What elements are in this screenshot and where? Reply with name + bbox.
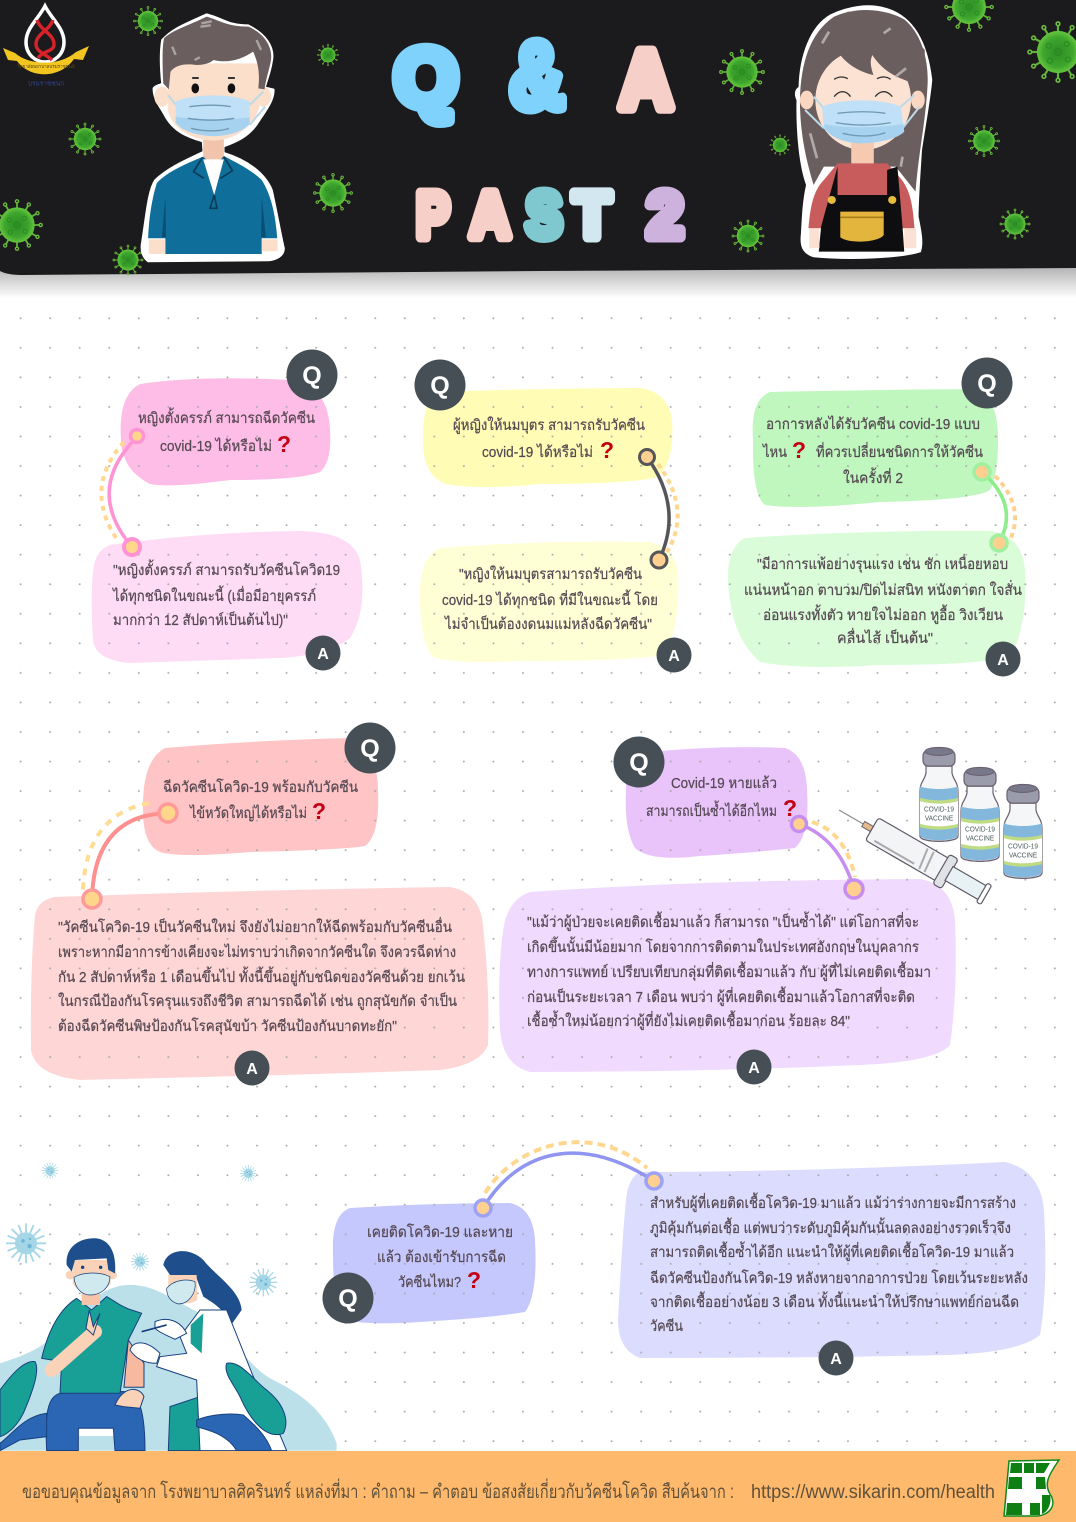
illustration: vaccine vials: VACCINE: [925, 815, 954, 822]
connector: [792, 816, 863, 898]
Q badge: Q: [338, 1285, 358, 1313]
question text: [453, 416, 645, 463]
Q badge: [962, 358, 1012, 408]
answer text: [112, 559, 340, 629]
icon: college logo: บรมราชชนก: [28, 80, 64, 88]
answer text: [442, 565, 658, 633]
answer text: เกิดขึ้นนั้นมีน้อยมาก โดยจากการติดตามในประเทศอังกฤษในบุคลากร: [527, 936, 919, 956]
Q badge: Q: [360, 735, 380, 763]
question bubble: [333, 1203, 536, 1323]
question bubble: [121, 378, 330, 485]
A badge: A: [997, 652, 1009, 669]
question bubble: [423, 388, 672, 487]
panel: pregnant women: [92, 350, 362, 670]
question text: ไข้หวัดใหญ่ได้หรือไม่: [189, 804, 307, 822]
question text: ที่ควรเปลี่ยนชนิดการให้วัคซีน: [816, 441, 983, 461]
question text: แล้ว ต้องเข้ารับการฉีด: [377, 1249, 506, 1266]
connector: [475, 1142, 662, 1216]
title: PAST 2: 2: [647, 179, 683, 251]
panel: vaccination after recovery: [322, 1142, 1045, 1376]
footer bar: [0, 1451, 1076, 1522]
answer text: สามารถติดเชื้อซ้ำได้อีก แนะนำให้ผู้ที่เคยติดเชื้อโควิด-19 มาแล้ว: [650, 1241, 1014, 1261]
answer text: "วัคซีนโควิด-19 เป็นวัคซีนใหม่ จึงยังไม่อยากให้ฉีดพร้อมกับวัคซีนอื่น: [58, 916, 452, 936]
question text: Covid-19 หายแล้ว: [671, 775, 777, 792]
answer text: ก่อนเป็นระยะเวลา 7 เดือน พบว่า ผู้ที่เคยติดเชื้อมาแล้วโอกาสที่จะติด: [527, 986, 915, 1006]
answer text: "แม้ว่าผู้ป่วยจะเคยติดเชื้อมาแล้ว ก็สามารถ "เป็นซ้ำได้" แต่โอกาสที่จะ: [527, 911, 919, 931]
answer text: สำหรับผู้ที่เคยติดเชื้อโควิด-19 มาแล้ว แม้ว่าร่างกายจะมีการสร้าง: [650, 1192, 1016, 1212]
footer credits text: https://www.sikarin.com/health: [751, 1482, 995, 1503]
answer text: จากติดเชื้ออย่างน้อย 3 เดือน ทั้งนี้แนะนำให้ปรึกษาแพทย์ก่อนฉีด: [650, 1291, 1019, 1311]
illustration: vaccine vials: VACCINE: [966, 835, 995, 842]
A badge: [736, 1050, 772, 1084]
question text: ไหน: [762, 443, 787, 461]
question text: วัคซีนไหม?: [398, 1273, 461, 1291]
Q badge: [614, 736, 664, 788]
answer text: มากกว่า 12 สัปดาห์เป็นต้นไป)": [113, 610, 288, 629]
question text: ฉีดวัคซีนโควิด-19 พร้อมกับวัคซีน: [163, 778, 358, 796]
question text: หญิงตั้งครรภ์ สามารถฉีดวัคซีน: [138, 407, 315, 427]
panel: breastfeeding mothers: [414, 360, 692, 672]
question text: เคยติดโควิด-19 และหาย: [367, 1223, 513, 1241]
connector: [83, 803, 177, 908]
A badge: A: [246, 1061, 258, 1078]
question bubble: [753, 389, 998, 507]
footer credits text: ขอขอบคุณข้อมูลจาก โรงพยาบาลศิครินทร์ แหล่งที่มา : คำถาม – คำตอบ ข้อสงสัยเกี่ยวกับวัคซีนโควิด สืบค้นจาก :: [22, 1478, 734, 1504]
title: Q & A: [394, 22, 672, 129]
question text: สามารถเป็นซ้ำได้อีกไหม: [646, 800, 777, 820]
illustration: vaccine vials: VACCINE: [1009, 852, 1038, 859]
answer text: ต้องฉีดวัคซีนพิษป้องกันโรคสุนัขบ้า วัคซีนป้องกันบาดทะยัก": [58, 1017, 397, 1035]
Q badge: Q: [302, 362, 322, 390]
A badge: A: [748, 1060, 760, 1077]
panel: flu vaccine: [31, 722, 488, 1086]
question text: ?: [277, 431, 291, 457]
A badge: A: [830, 1351, 842, 1368]
title: Q & A: Q: [394, 33, 458, 124]
Q badge: [322, 1272, 374, 1324]
Q badge: [344, 722, 396, 774]
answer text: เพราะหากมีอาการข้างเคียงจะไม่ทราบว่าเกิดจากวัคซีนใด จึงควรฉีดห่าง: [58, 943, 456, 961]
title: Q & A: A: [620, 35, 672, 126]
answer bubble: [499, 879, 956, 1072]
Q badge: Q: [430, 372, 450, 400]
question text: covid-19 ได้หรือไม่: [160, 437, 272, 455]
answer bubble: [728, 531, 1025, 667]
answer text: [744, 553, 1022, 647]
answer text: "มีอาการแพ้อย่างรุนแรง เช่น ชัก เหนื่อยหอบ: [757, 553, 1008, 573]
Q badge: [286, 350, 338, 400]
answer text: เชื้อซ้ำใหม่น้อยกว่าผู้ที่ยังไม่เคยติดเชื้อมาก่อน ร้อยละ 84": [527, 1010, 850, 1030]
icon: college logo: [3, 6, 89, 88]
Q badge: [414, 360, 466, 410]
illustration: woman wearing mask: [796, 6, 932, 258]
question text: ?: [600, 437, 614, 463]
question text: ในครั้งที่ 2: [843, 467, 903, 487]
answer text: ทางการแพทย์ เปรียบเทียบกลุ่มที่ติดเชื้อมาแล้ว กับ ผู้ที่ไม่เคยติดเชื้อมา: [527, 961, 931, 981]
A badge: A: [668, 648, 680, 665]
A badge: A: [317, 646, 329, 663]
title: PAST 2: T: [574, 179, 610, 251]
header shadow band: [0, 268, 1076, 298]
icon: college logo: วิทยาลัยพยาบาลบรมราชชนนี: [17, 64, 75, 69]
title: Q & A: &: [509, 22, 565, 129]
illustration: patient receiving vaccine: [0, 1162, 337, 1451]
question text: ผู้หญิงให้นมบุตร สามารถรับวัคซีน: [453, 416, 645, 434]
answer text: ได้ทุกชนิดในขณะนี้ (เมื่อมีอายุครรภ์: [112, 585, 316, 605]
question text: ?: [783, 795, 797, 821]
answer text: "หญิงให้นมบุตรสามารถรับวัคซีน: [459, 565, 642, 583]
answer bubble: [31, 887, 488, 1080]
question text: [367, 1223, 513, 1293]
question text: covid-19 ได้หรือไม่: [482, 443, 593, 461]
illustration: vaccine vials: COVID-19: [965, 826, 995, 833]
illustration: vaccine vials: COVID-19: [1008, 843, 1038, 850]
answer bubble: [92, 531, 362, 663]
title: PAST 2: [416, 179, 683, 251]
question text: [646, 775, 797, 821]
answer bubble: [618, 1162, 1045, 1358]
connector: [101, 430, 144, 555]
illustration: vaccine vials: COVID-19: [924, 806, 954, 813]
answer text: [527, 911, 931, 1030]
answer text: ในกรณีป้องกันโรครุนแรงถึงชีวิต สามารถฉีดได้ เช่น ถูกสุนัขกัด จำเป็น: [58, 991, 457, 1010]
question text: [138, 407, 315, 457]
A badge: [818, 1340, 854, 1376]
A badge: [234, 1050, 270, 1086]
illustration: vaccine vials: [920, 747, 1042, 878]
connector: [974, 464, 1015, 551]
icon: hospital logo: [1004, 1460, 1059, 1516]
A badge: [656, 638, 692, 672]
question text: [163, 778, 358, 824]
answer text: ภูมิคุ้มกันต่อเชื้อ แต่พบว่าระดับภูมิคุ้มกันนั้นลดลงอย่างรวดเร็วจึง: [650, 1217, 1011, 1237]
question text: ?: [312, 798, 326, 824]
header panel: [0, 0, 1076, 275]
Q badge: Q: [977, 370, 997, 398]
answer bubble: [420, 542, 678, 662]
answer text: คลื่นไส้ เป็นต้น": [837, 627, 933, 647]
title: PAST 2: P: [416, 179, 450, 251]
answer text: วัคซีน: [650, 1318, 683, 1335]
panel: reinfection: [499, 736, 1042, 1084]
illustration: man wearing mask: [141, 14, 284, 262]
answer text: อ่อนแรงทั้งตัว หายใจไม่ออก หูอื้อ วิงเวียน: [763, 604, 1003, 624]
answer text: ฉีดวัคซีนป้องกันโควิด-19 หลังหายจากอาการป่วย โดยเว้นระยะหลัง: [650, 1269, 1028, 1287]
panel: side effects: [728, 358, 1025, 676]
question bubble: [626, 747, 808, 858]
title: PAST 2: S: [526, 179, 562, 251]
answer text: แน่นหน้าอก ตาบวม/ปิดไม่สนิท หนังตาตก ใจสั่น: [744, 579, 1022, 599]
icon: viruses in header: [0, 0, 1076, 275]
title: PAST 2: A: [470, 179, 510, 251]
Q badge: Q: [629, 749, 649, 777]
connector: [640, 450, 678, 568]
dotted background grid: [0, 280, 1076, 1455]
answer text: "หญิงตั้งครรภ์ สามารถรับวัคซีนโควิด19: [113, 559, 340, 579]
question text: ?: [792, 437, 806, 463]
question text: ?: [467, 1267, 481, 1293]
illustration: syringe: [830, 795, 995, 910]
answer text: covid-19 ได้ทุกชนิด ที่มีในขณะนี้ โดย: [442, 589, 658, 609]
answer text: ไม่จำเป็นต้องงดนมแม่หลังฉีดวัคซีน": [444, 614, 652, 633]
answer text: [650, 1192, 1028, 1335]
A badge: [306, 636, 340, 670]
question text: [762, 415, 983, 487]
question text: อาการหลังได้รับวัคซีน covid-19 แบบ: [766, 415, 980, 433]
question bubble: [143, 738, 378, 855]
answer text: กัน 2 สัปดาห์หรือ 1 เดือนขึ้นไป ทั้งนี้ขึ้นอยู่กับชนิดของวัคซีนด้วย ยกเว้น: [58, 966, 465, 986]
A badge: [986, 642, 1020, 676]
answer text: [58, 916, 465, 1035]
